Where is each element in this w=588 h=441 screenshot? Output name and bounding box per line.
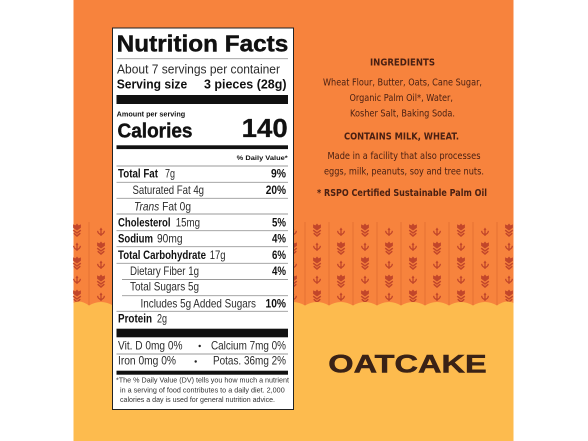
sodium [118, 232, 286, 246]
ingredients list: Wheat Flour, Butter, Oats, Cane Sugar, [323, 78, 482, 89]
ingredients heading: INGREDIENTS [370, 57, 435, 68]
daily value header: % Daily Value* [237, 155, 288, 162]
iron and potassium: Iron 0mg 0% [118, 354, 176, 368]
ingredients list: Organic Palm Oil*, Water, [350, 93, 453, 104]
total carbohydrate: 6% [272, 248, 286, 262]
iron and potassium: Potas. 36mg 2% [213, 354, 286, 368]
calories: 140 [242, 113, 288, 143]
calories [118, 113, 288, 143]
total fat: Total Fat [118, 167, 158, 181]
label box [112, 28, 294, 410]
ingredients list: Kosher Salt, Baking Soda. [350, 108, 455, 119]
total fat: 7g [165, 167, 175, 181]
dietary fiber [130, 264, 286, 278]
total carbohydrate [118, 248, 286, 262]
facility note: Made in a facility that also processes [328, 151, 480, 162]
yellow scalloped lower panel [74, 301, 514, 441]
saturated fat: Saturated Fat 4g [132, 183, 204, 197]
total fat [118, 167, 286, 181]
vitamin d and calcium [118, 338, 286, 352]
added sugars: 10% [266, 296, 286, 310]
sodium: Sodium [118, 232, 153, 246]
palm oil note: * RSPO Certified Sustainable Palm Oil [317, 188, 487, 199]
protein: Protein [118, 312, 152, 326]
amount per serving: Amount per serving [117, 112, 185, 119]
calories: Calories [118, 119, 192, 142]
serving size: 3 pieces (28g) [204, 77, 286, 91]
serving size: Serving size [117, 77, 187, 91]
footnote: calories a day is used for general nutrition advice. [120, 395, 275, 404]
protein: 2g [157, 312, 167, 326]
cholesterol: 15mg [176, 216, 200, 230]
dietary fiber: Dietary Fiber 1g [130, 264, 199, 278]
ingredients list [323, 78, 482, 119]
orange background panel [74, 0, 514, 310]
total fat: 9% [271, 167, 286, 181]
footnote: *The % Daily Value (DV) tells you how much a nutrient [116, 376, 289, 385]
footnote [116, 376, 289, 404]
wheat pattern band [73, 222, 513, 306]
vitamin d and calcium: Calcium 7mg 0% [211, 338, 286, 352]
nutrition facts label [112, 28, 294, 410]
cholesterol: 5% [272, 216, 286, 230]
vitamin d and calcium: Vit. D 0mg 0% [118, 338, 183, 352]
total carbohydrate: Total Carbohydrate [118, 248, 206, 262]
ingredients and allergen text [317, 57, 487, 199]
serving size [117, 77, 286, 91]
saturated fat: 20% [266, 183, 286, 197]
servings per container: About 7 servings per container [117, 62, 280, 76]
allergen statement: CONTAINS MILK, WHEAT. [344, 132, 459, 143]
facility note [324, 151, 484, 177]
cholesterol [118, 216, 286, 230]
saturated fat [132, 183, 286, 197]
total sugars: Total Sugars 5g [130, 280, 199, 294]
sodium: 90mg [157, 232, 182, 246]
cholesterol: Cholesterol [118, 216, 170, 230]
facility note: eggs, milk, peanuts, soy and tree nuts. [324, 166, 484, 177]
added sugars: Includes 5g Added Sugars [140, 296, 256, 310]
trans fat: Trans Fat 0g [134, 199, 191, 213]
footnote: in a serving of food contributes to a daily diet. 2,000 [120, 386, 285, 394]
title: Nutrition Facts [117, 31, 288, 57]
dietary fiber: 4% [272, 264, 286, 278]
product name: OATCAKE [328, 351, 487, 379]
iron and potassium [118, 354, 286, 368]
total carbohydrate: 17g [210, 248, 226, 262]
sodium: 4% [272, 232, 286, 246]
